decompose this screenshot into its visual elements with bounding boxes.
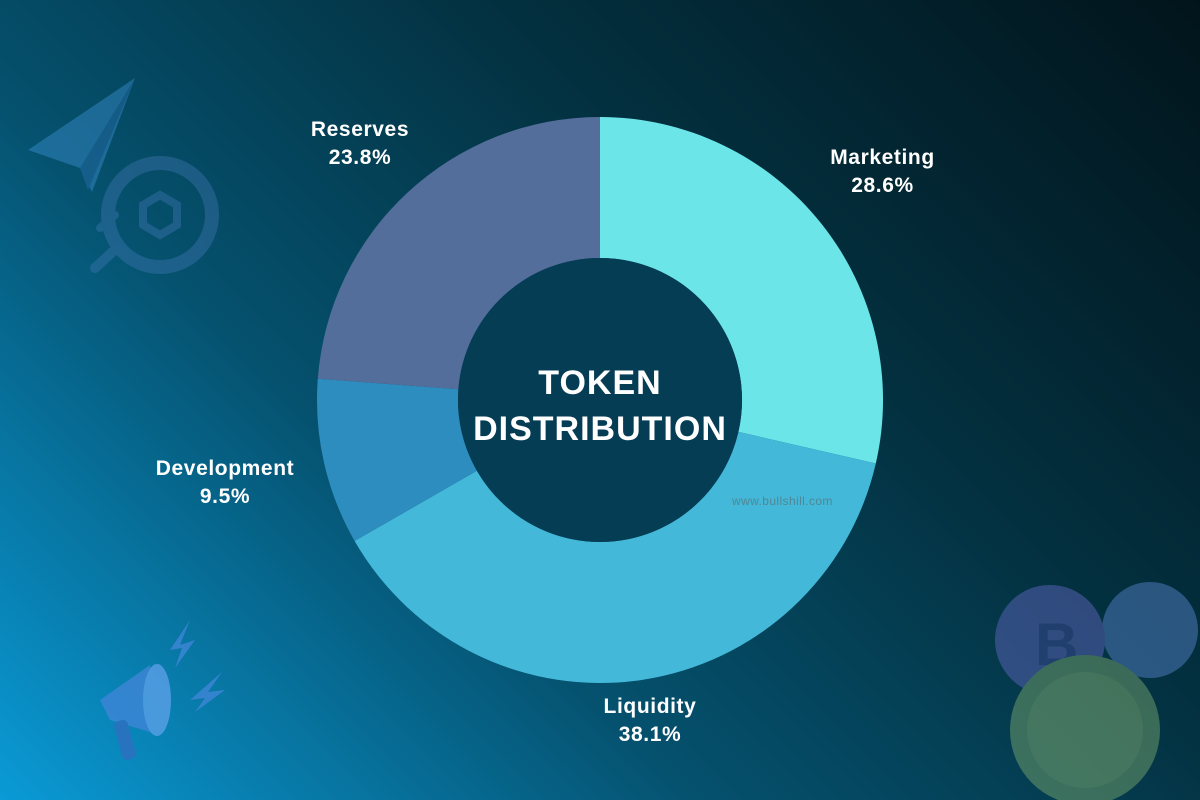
label: reserves: 23.8%: [329, 146, 391, 169]
label: reserves: [311, 118, 409, 169]
center title: DISTRIBUTION: [473, 410, 727, 448]
slice: liquidity: [355, 432, 876, 683]
slice: development: [317, 379, 477, 541]
icon: coins: [995, 582, 1198, 800]
icon: coins: B: [1035, 611, 1078, 678]
label: liquidity: 38.1%: [619, 723, 681, 746]
label: development: [156, 457, 294, 508]
label: marketing: 28.6%: [851, 174, 914, 197]
icon: megaphone: [100, 620, 225, 761]
watermark: www.bullshill.com: [732, 494, 833, 508]
label: marketing: Marketing: [830, 146, 935, 169]
icon: rocket token: [95, 163, 212, 268]
label: reserves: Reserves: [311, 118, 409, 141]
label: marketing: [830, 146, 935, 197]
icon: paper plane: [28, 78, 135, 192]
center title: [473, 364, 727, 448]
slice: marketing: [600, 117, 883, 464]
label: liquidity: [604, 695, 696, 746]
label: development: Development: [156, 457, 294, 480]
center hole: [458, 258, 742, 542]
label: development: 9.5%: [200, 485, 250, 508]
label: liquidity: Liquidity: [604, 695, 696, 718]
center title: TOKEN: [538, 364, 662, 402]
slice: reserves: [318, 117, 600, 389]
